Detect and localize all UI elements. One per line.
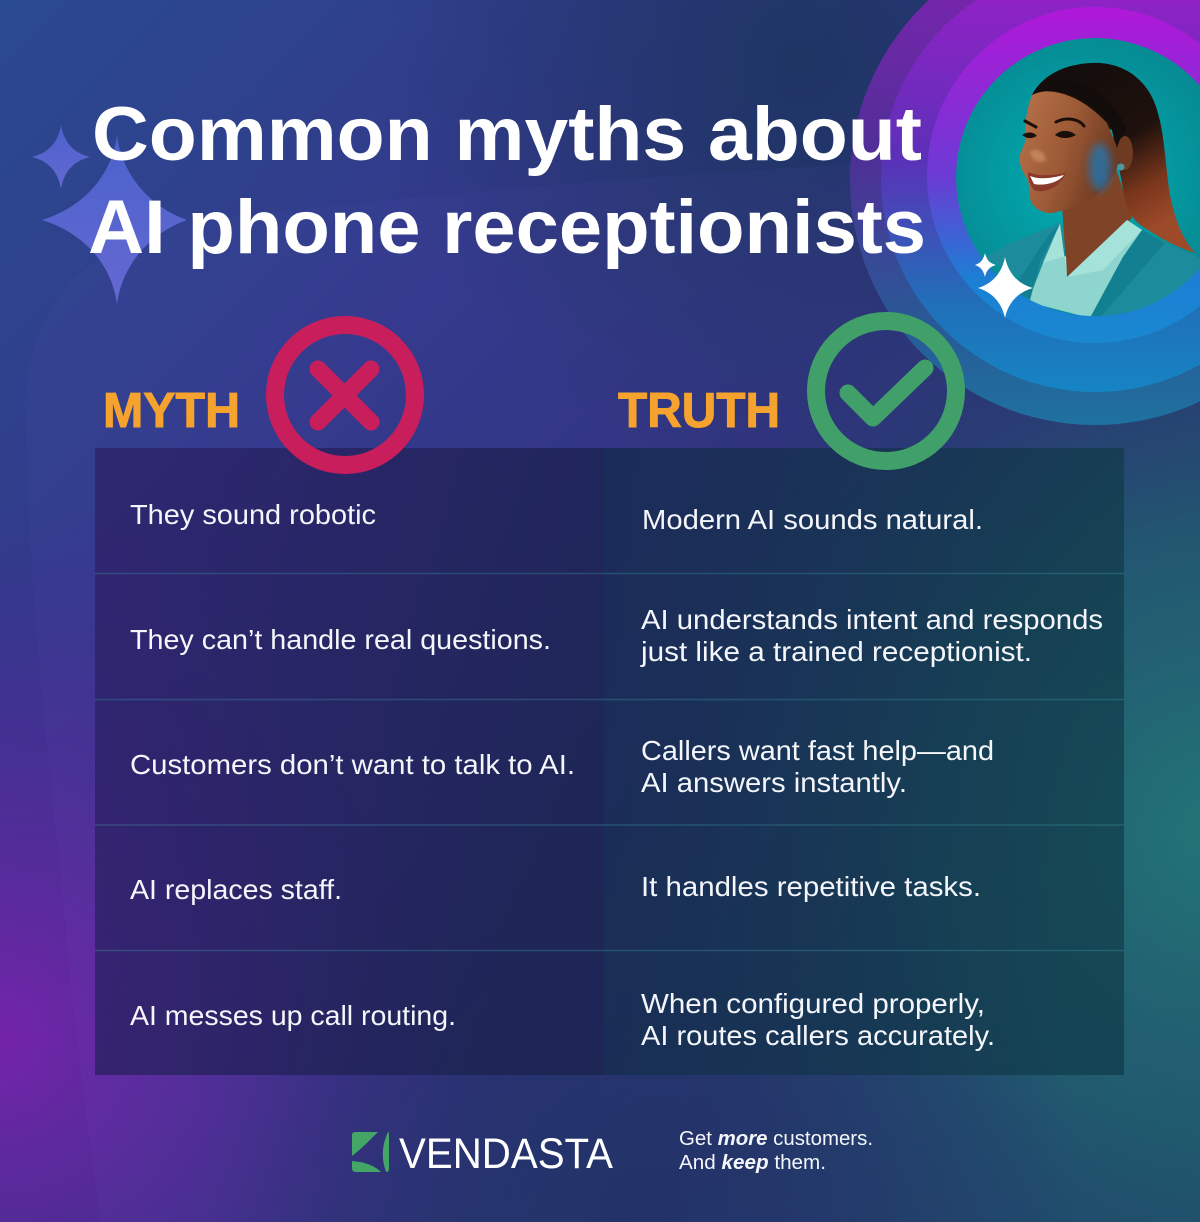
background sparkles — [32, 125, 187, 304]
myth rows: AI messes up call routing. — [130, 1000, 456, 1031]
icon: large white sparkle — [978, 257, 1033, 318]
tagline: Get more customers. — [679, 1128, 873, 1150]
heading: truth: TRUTH — [618, 384, 780, 438]
myth rows: They can’t handle real questions. — [130, 624, 551, 655]
myth rows: AI replaces staff. — [130, 874, 342, 905]
table — [95, 448, 1124, 1075]
title: AI phone receptionists — [88, 185, 926, 270]
panel: myth column — [95, 448, 604, 1075]
icon: green check in circle — [816, 321, 956, 461]
icon: small white sparkle — [975, 253, 996, 277]
panel: truth column — [604, 448, 1124, 1075]
myth rows: Customers don’t want to talk to AI. — [130, 749, 575, 780]
vendasta logo — [352, 1130, 613, 1178]
tagline: And keep them. — [679, 1152, 826, 1174]
ring: outer — [850, 0, 1200, 425]
truth rows: AI routes callers accurately. — [641, 1020, 995, 1051]
truth rows: Callers want fast help—and — [641, 735, 994, 766]
myth rows: They sound robotic — [130, 499, 376, 530]
tagline — [679, 1128, 873, 1174]
portrait photo — [956, 38, 1200, 340]
title — [88, 92, 926, 270]
myth rows — [130, 499, 575, 1031]
icon: logo mark — [352, 1132, 389, 1172]
truth rows: When configured properly, — [641, 988, 985, 1019]
ring: third — [881, 0, 1200, 392]
title: Common myths about — [92, 92, 922, 177]
heading: myth: MYTH — [103, 384, 240, 438]
truth rows — [640, 504, 1103, 1051]
truth rows: Modern AI sounds natural. — [642, 504, 983, 535]
truth rows: It handles repetitive tasks. — [641, 871, 981, 902]
ring: second — [927, 7, 1200, 343]
truth rows: AI understands intent and responds — [641, 604, 1103, 635]
concentric rings and portrait — [850, 0, 1200, 425]
truth rows: just like a trained receptionist. — [640, 636, 1032, 667]
truth rows: AI answers instantly. — [641, 767, 907, 798]
icon: red x in circle — [275, 325, 415, 465]
logo wordmark: VENDASTA — [399, 1130, 613, 1178]
